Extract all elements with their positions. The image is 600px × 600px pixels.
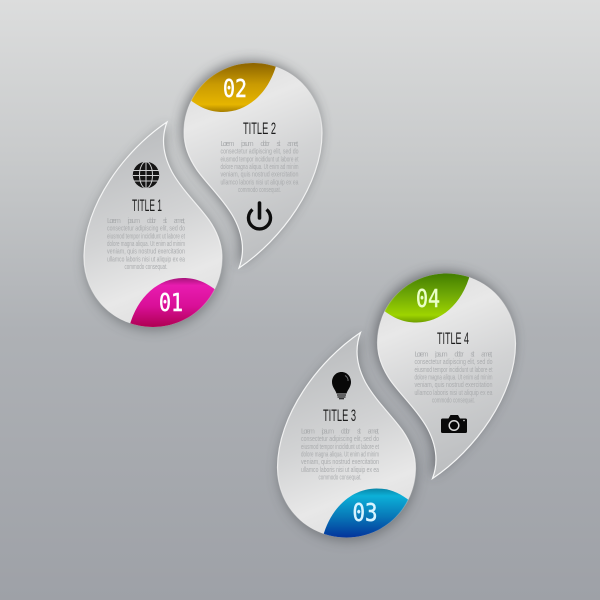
text block 1: commodo consequat. <box>124 262 168 271</box>
cap: blue <box>324 488 408 538</box>
pair 1-2 shapes <box>84 50 322 340</box>
text block 1 <box>107 216 185 271</box>
number 04: 04 <box>416 284 440 313</box>
text block 2: veniam, quis nostrud exercitation <box>220 170 298 179</box>
text block 2: dolore magna aliqua. Ut enim ad minim <box>220 162 299 171</box>
cap: gold <box>191 63 276 112</box>
text block 3: commodo consequat. <box>318 472 362 482</box>
text block 2: ullamco laboris nisi ut aliquip ex ea <box>220 177 298 186</box>
text block 1: dolore magna aliqua. Ut enim ad minim <box>107 239 185 248</box>
cap: magenta <box>130 278 215 327</box>
text block 4: dolore magna aliqua. Ut enim ad minim <box>414 372 493 382</box>
text block 4 <box>414 350 493 404</box>
icon: globe <box>133 162 159 188</box>
text block 3: consectetur adipiscing elit, sed do <box>301 434 379 443</box>
shape: drop 4 <box>364 260 516 478</box>
text block 3: Lorem ipsum dolor sit amet, <box>301 426 379 436</box>
text block 3: veniam, quis nostrud exercitation <box>301 457 379 466</box>
text block 3: dolore magna aliqua. Ut enim ad minim <box>301 450 379 458</box>
cap: green <box>384 274 470 322</box>
text block 2: commodo consequat. <box>238 185 281 194</box>
text block 4: eiusmod tempor incididunt ut labore et <box>414 365 493 374</box>
title 4: TITLE 4 <box>437 329 469 348</box>
text block 1: Lorem ipsum dolor sit amet, <box>107 216 185 225</box>
number 03: 03 <box>352 498 378 527</box>
shape: drop 3 <box>278 332 428 550</box>
text block 1: ullamco laboris nisi ut aliquip ex ea <box>107 254 185 263</box>
text block 4: Lorem ipsum dolor sit amet, <box>414 350 492 358</box>
text block 2: eiusmod tempor incididunt ut labore et <box>220 154 299 163</box>
text block 4: veniam, quis nostrud exercitation <box>414 380 492 389</box>
text block 3 <box>301 426 379 482</box>
text block 1: veniam, quis nostrud exercitation <box>107 247 185 256</box>
shape: drop 2 <box>171 50 322 268</box>
title 2: TITLE 2 <box>243 119 276 138</box>
text block 4: ullamco laboris nisi ut aliquip ex ea <box>414 388 492 397</box>
text block 1: consectetur adipiscing elit, sed do <box>107 224 185 233</box>
icon: camera <box>441 415 467 433</box>
title 3: TITLE 3 <box>323 406 356 425</box>
text block 4: commodo consequat. <box>432 396 475 404</box>
text block 2: Lorem ipsum dolor sit amet, <box>220 139 298 148</box>
icon: light bulb <box>332 372 351 399</box>
text block 4: consectetur adipiscing elit, sed do <box>414 357 492 366</box>
text block 1: eiusmod tempor incididunt ut labore et <box>107 231 185 240</box>
text block 2: consectetur adipiscing elit, sed do <box>220 147 298 156</box>
icon: power <box>249 203 270 229</box>
text block 2 <box>220 139 299 194</box>
shape: drop 1 <box>84 122 235 340</box>
text block 3: ullamco laboris nisi ut aliquip ex ea <box>301 465 379 474</box>
text block 3: eiusmod tempor incididunt ut labore et <box>301 442 379 451</box>
number 02: 02 <box>223 74 247 103</box>
text: TITLE 1 <box>132 196 162 215</box>
pair 3-4 shapes <box>278 260 516 550</box>
number 01: 01 <box>159 288 183 317</box>
